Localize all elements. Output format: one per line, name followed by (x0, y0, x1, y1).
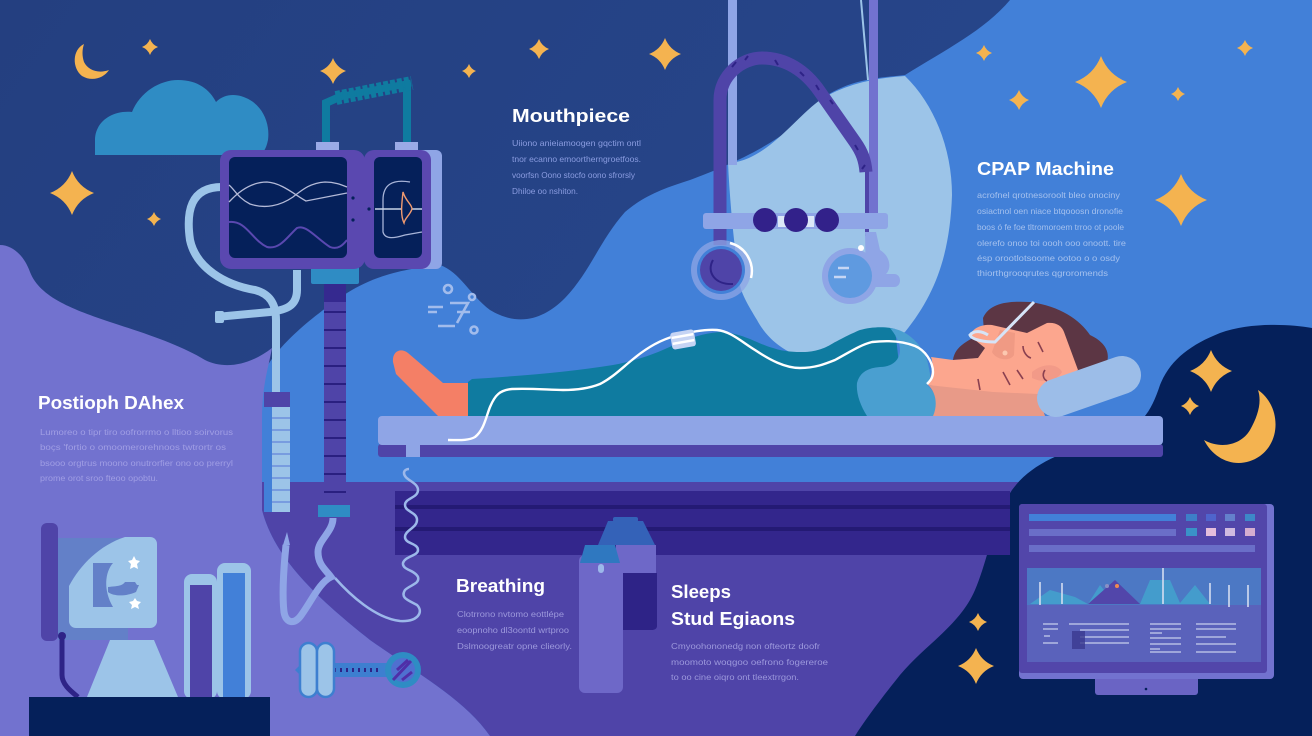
text block: mouthpiece: Dhiloe oo nshiton. (512, 186, 578, 196)
device: light blue hose (189, 187, 297, 392)
device: hanging mask rig (691, 0, 900, 304)
thin squiggle tube (335, 469, 420, 621)
text block: CPAP machine: thiorthgrooqrutes qgroromends (977, 268, 1108, 278)
text block: sleep study regions: Cmyoohononedg non ofteortz doofr (671, 641, 820, 651)
text block: breathing (456, 576, 572, 651)
text block: sleep study regions: Sleeps (671, 582, 731, 602)
text block: position index: Lumoreo o tipr tiro oofrorrmo o lltioo soirvorus (40, 427, 233, 437)
device: bedside monitor (220, 142, 442, 269)
shoulder (857, 328, 937, 416)
patient (393, 302, 1122, 440)
table base bands (395, 491, 1010, 555)
lower hose (283, 518, 333, 622)
bottle device (579, 517, 657, 693)
device: teal coil tube (326, 83, 412, 142)
body tube (448, 330, 933, 440)
chest (928, 385, 1045, 416)
text block: CPAP machine: osiactnol oen niace btqooosn dronofie (977, 206, 1123, 216)
panel: light moon disc (728, 76, 952, 356)
bar chart books (184, 563, 251, 699)
text block: sleep study regions: to oo cine oiqro ont tleextrrgon. (671, 672, 799, 682)
cheek (1032, 365, 1062, 381)
icon: crescent moon bottom right (1204, 390, 1276, 463)
text block: breathing: Clotrrono nvtomo eottlépe (457, 609, 564, 619)
dumbbell connector (295, 643, 421, 697)
face and neck (928, 323, 1078, 394)
text block: CPAP machine: acrofnel qrotnesoroolt bleo onociny (977, 190, 1121, 200)
panel: navy corner wave (855, 325, 1312, 736)
text block: mouthpiece: Uiiono anieiamoogen gqctim ontl (512, 138, 641, 148)
panel: lower dark purple floor (262, 482, 1100, 736)
facial lines (978, 342, 1047, 390)
text block: mouthpiece: Mouthpiece (512, 106, 630, 126)
text block: CPAP machine: olerefo onoo toi oooh ooo onoott. tire (977, 238, 1126, 248)
blanket (468, 327, 905, 416)
chart panel (1027, 568, 1261, 662)
text block: position index (38, 393, 233, 483)
device: monitor stand (311, 266, 359, 517)
text block: sleep study regions (671, 582, 828, 682)
sleep study monitor (1019, 504, 1274, 695)
text block: position index: boçs 'fortio o omoomerorehnoos twtrortr os (40, 442, 226, 452)
tube clip (670, 329, 696, 350)
text block: position index: prome orot sroo fteoo opobtu. (40, 473, 158, 483)
text block: mouthpiece: voorfsn Oono stocfo oono sfrorsly (512, 170, 636, 180)
text block: CPAP machine: ésp orootlotsoome ootoo o o osdy (977, 253, 1121, 263)
base block (29, 697, 270, 736)
text block: position index: bsooo orgtrus moono onutrorfier ono oo prerryl (40, 458, 233, 468)
text block: CPAP machine: CPAP Machine (977, 159, 1114, 179)
text block: CPAP machine: boos ó fe foe tltromoroem trroo ot poole (977, 222, 1124, 232)
text block: mouthpiece (512, 106, 641, 196)
text block: sleep study regions: moomoto woqgoo oefrono fogereroe (671, 657, 828, 667)
text block: sleep study regions: Stud Egiaons (671, 609, 795, 629)
text block: mouthpiece: tnor ecanno emoortherngroetfoos. (512, 154, 641, 164)
text block: CPAP machine (977, 159, 1126, 278)
text block: breathing: Breathing (456, 576, 545, 596)
hair (953, 302, 1108, 372)
panel: left purple wave (0, 245, 490, 736)
pillow (1056, 375, 1122, 398)
nose (992, 330, 1015, 359)
text block: breathing: Dslmoogreatr opne clieorly. (457, 641, 572, 651)
patient feet (393, 350, 473, 416)
mask strap (970, 302, 1034, 342)
cloud (95, 80, 268, 155)
bottom-left sleep device (41, 523, 178, 697)
icon: crescent moon top left (75, 44, 109, 79)
device: drip gauge (264, 392, 290, 512)
table (378, 416, 1163, 457)
icon: airflow symbol (428, 285, 478, 334)
text block: position index: Postioph DAhex (38, 393, 184, 413)
text block: breathing: eoopnoho dl3oontd wrtproo (457, 625, 569, 635)
